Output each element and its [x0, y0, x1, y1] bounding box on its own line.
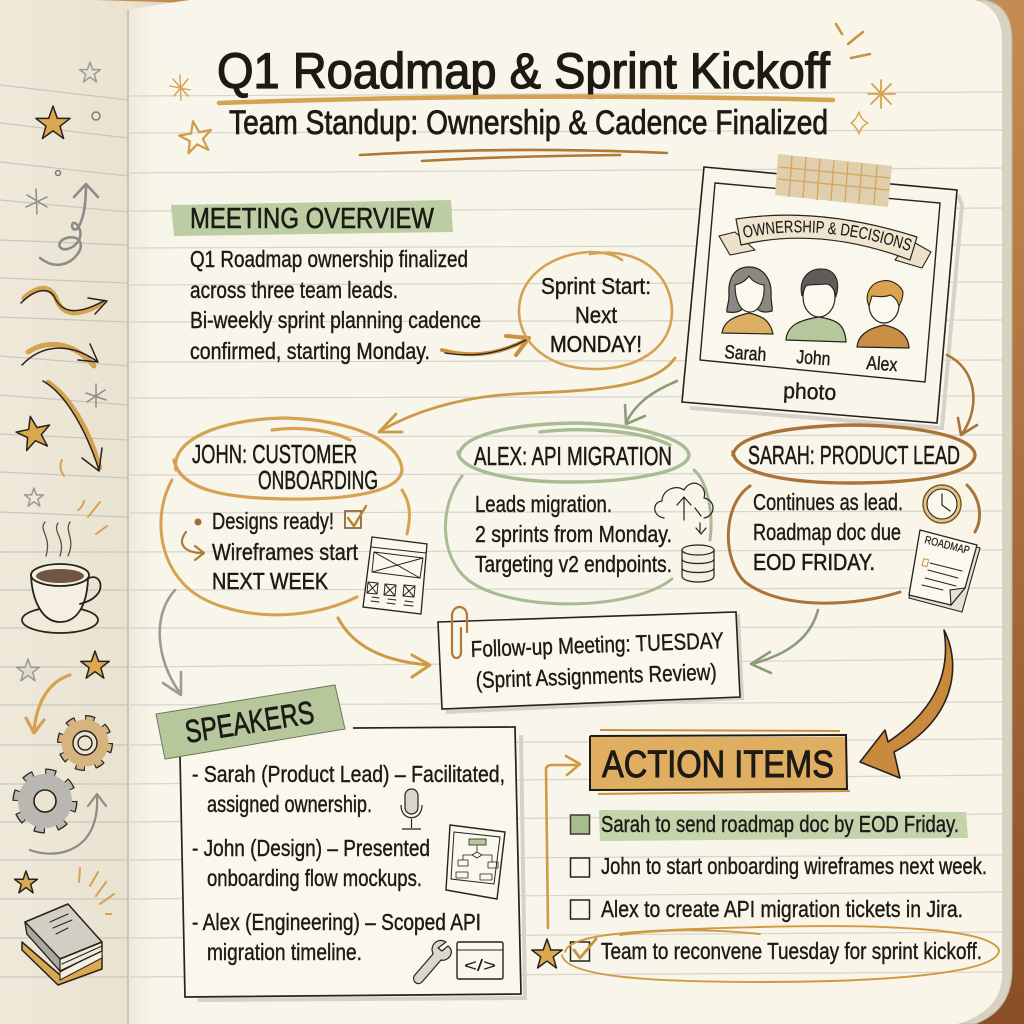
banner text: OWNERSHIP & DECISIONS: [743, 220, 912, 250]
note box: [438, 612, 740, 709]
icon: gold gear: [62, 720, 108, 766]
left margin doodles: [14, 62, 114, 985]
icon: coffee cup: [22, 522, 101, 633]
title: Q1 Roadmap & Sprint Kickoff: [217, 43, 830, 99]
heading highlight: [171, 200, 453, 236]
heading: SPEAKERS: [182, 694, 316, 750]
doodle: dashes: [60, 460, 107, 534]
doodle: gold star: [36, 106, 70, 139]
panel: john customer onboarding: Wireframes start: [212, 539, 359, 565]
header ellipse: [733, 425, 975, 483]
icon: roadmap document: [909, 530, 980, 612]
doodle: gold arrow: [26, 675, 70, 733]
side arrow: [546, 756, 580, 928]
overview text: across three team leads.: [190, 277, 398, 303]
heading: MEETING OVERVIEW: [190, 203, 435, 235]
icon: code window: [457, 942, 503, 979]
panel: alex api migration: Targeting v2 endpoints.: [475, 551, 672, 577]
callout: follow-up meeting: [438, 607, 742, 712]
inner frame: [700, 183, 940, 382]
notebook page stack edge: [800, 0, 1012, 1024]
icon: paperclip: [452, 607, 467, 658]
big arrow: [860, 630, 953, 778]
panel: sarah product lead: Roadmap doc due: [753, 519, 901, 545]
body arc: [161, 480, 409, 615]
doodle: dashes: [79, 868, 114, 914]
title decorations: [170, 24, 895, 154]
left notebook page: [0, 0, 190, 1024]
arrow: overview to sprint start: [442, 336, 529, 355]
doodle: outline gold star: [177, 118, 214, 154]
icon: wrench: [414, 940, 451, 984]
person: alex: [857, 281, 909, 376]
doodle: grey outline star: [80, 62, 100, 82]
icon: checkbox: [345, 506, 366, 528]
body text: Leads migration.: [475, 491, 612, 517]
icon: stack of books: [22, 904, 102, 985]
callout: sprint start: MONDAY!: [550, 331, 642, 357]
heading tape: [156, 685, 345, 759]
doodle: gold squiggle arrow: [21, 288, 107, 314]
panel: action items: [532, 630, 999, 982]
label: Sarah: [724, 342, 767, 366]
doodle: gold star: [15, 871, 37, 893]
panel: alex api migration: 2 sprints from Monday.: [475, 521, 672, 547]
arrow: john to follow-up: [338, 618, 430, 677]
polaroid photo: [681, 154, 964, 430]
doodle: gold asterisk left: [170, 75, 190, 100]
doodle: outline star: [24, 488, 44, 506]
speaker text: [192, 761, 505, 965]
body arc: [728, 485, 980, 603]
speaker text: assigned ownership.: [207, 791, 372, 817]
subtitle underlines: [360, 150, 667, 161]
speaker text: - Sarah (Product Lead) – Facilitated,: [192, 761, 505, 787]
body text: Designs ready!: [212, 508, 334, 534]
ribbon banner: [718, 214, 932, 268]
icon: microphone: [401, 789, 422, 829]
overview text: Q1 Roadmap ownership finalized: [190, 246, 468, 272]
callout: follow-up meeting: (Sprint Assignments Review): [475, 659, 717, 693]
gutter line: [127, 10, 129, 1024]
speaker text: migration timeline.: [207, 939, 362, 965]
label: John: [796, 347, 831, 370]
photo caption: photo: [783, 378, 837, 405]
header text: JOHN: CUSTOMER: [192, 439, 357, 469]
document label: ROADMAP: [923, 534, 971, 557]
doodle: gold curved arrow: [22, 344, 98, 366]
label: Alex: [866, 353, 898, 376]
doodle: grey asterisk: [26, 189, 47, 214]
ellipse: [519, 252, 672, 369]
doodle: gold asterisk right: [868, 80, 895, 108]
subtitle: Team Standup: Ownership & Cadence Finalized: [229, 104, 828, 142]
washi tape: [775, 154, 892, 207]
photo shadow: [690, 195, 962, 428]
icon: star: [532, 939, 562, 968]
icon: clock: [923, 485, 961, 523]
person: john: [786, 269, 846, 370]
heading box: [589, 730, 850, 794]
arrow: photo to sarah: [947, 355, 977, 435]
note shadow: [446, 614, 742, 712]
overview text: [190, 246, 481, 364]
doodle: small circles: [56, 112, 100, 176]
header ellipse: [458, 423, 689, 482]
panel: john customer onboarding: [161, 418, 427, 615]
doodle: long gold arrow: [43, 381, 102, 471]
doodle: grey arrow: [30, 794, 106, 854]
heading text: ACTION ITEMS: [602, 744, 834, 786]
item 1 highlight: [599, 810, 968, 841]
arrow: sprint start to john: [379, 358, 675, 432]
item 4 circle: [562, 926, 999, 982]
panel: alex api migration: [445, 423, 714, 604]
panel: speakers: [156, 685, 525, 1000]
overview text: Bi-weekly sprint planning cadence: [190, 307, 481, 333]
arrow: photo to alex: [625, 381, 677, 424]
panel: sarah product lead: EOD FRIDAY.: [753, 549, 875, 575]
overview text: confirmed, starting Monday.: [190, 338, 430, 364]
person: sarah: [722, 267, 773, 366]
header ellipse: [174, 418, 402, 499]
body arc: [445, 470, 711, 604]
title underline: [219, 97, 833, 103]
icon: grey gear: [18, 774, 72, 828]
speaker text: - John (Design) – Presented: [192, 835, 430, 861]
header text: ALEX: API MIGRATION: [474, 441, 672, 471]
arrow: john to speakers: [160, 590, 181, 695]
icon: wireframe page: [363, 537, 427, 614]
callout text: Sprint Start:: [541, 273, 651, 299]
panel: john customer onboarding: ONBOARDING: [258, 465, 378, 495]
doodle: grey swirl arrow: [40, 184, 98, 265]
note text: Follow-up Meeting: TUESDAY: [470, 627, 724, 662]
doodle: grey asterisk: [86, 384, 106, 407]
panel: john customer onboarding: NEXT WEEK: [212, 568, 329, 594]
body text: Continues as lead.: [753, 489, 903, 515]
box shadow: [198, 735, 525, 1000]
code symbol: </>: [464, 956, 496, 975]
speakers box: [180, 727, 521, 997]
callout: sprint start: [519, 252, 672, 369]
panel: sarah product lead: [728, 425, 980, 612]
doodle: sparkle rays: [836, 24, 870, 58]
speaker text: - Alex (Engineering) – Scoped API: [192, 909, 481, 935]
doodle: gold star: [81, 651, 109, 678]
icon: small arrow: [182, 532, 204, 560]
icon: cloud sync: [655, 483, 713, 534]
icon: tablet flowchart: [446, 825, 505, 899]
bullet: [194, 518, 202, 526]
panel: meeting overview: [171, 200, 481, 364]
arrow: sarah to follow-up: [751, 610, 818, 673]
icon: database: [682, 545, 714, 582]
speaker text: onboarding flow mockups.: [207, 865, 422, 891]
doodle: grey outline star: [17, 659, 39, 681]
polaroid frame: [682, 167, 957, 423]
doodle: diamond sparkle: [851, 112, 868, 134]
callout: sprint start: Next: [575, 302, 618, 328]
item 3: Alex to create API migration tickets in Jira.: [601, 896, 963, 922]
doodle: gold star: [14, 413, 54, 452]
